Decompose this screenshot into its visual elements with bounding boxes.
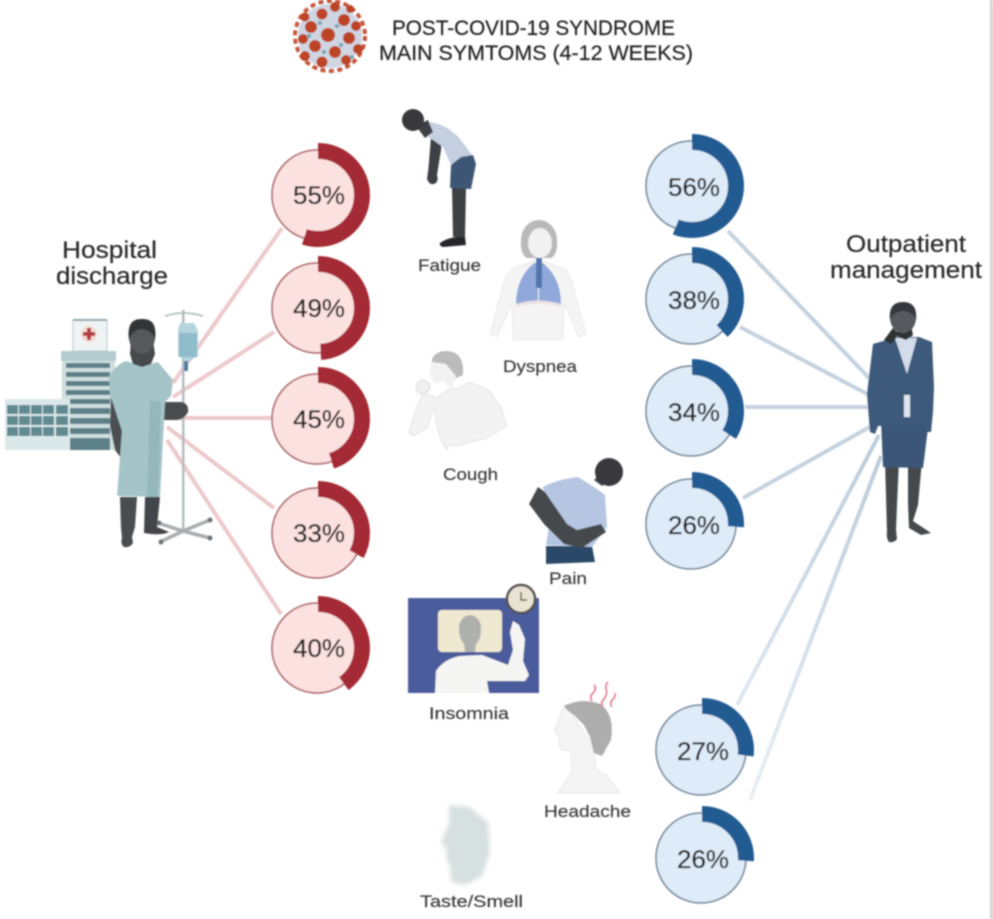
figure: headache bbox=[554, 682, 620, 793]
donut 26% bbox=[646, 479, 736, 569]
figure: patient bbox=[109, 319, 188, 547]
heading: outpatient management: Outpatient bbox=[846, 231, 966, 258]
icon: IV drip stand bbox=[156, 310, 212, 544]
donut 38%: 38% bbox=[668, 287, 720, 315]
figure: outpatient clinician bbox=[867, 302, 934, 542]
figure: fatigue bbox=[402, 109, 476, 247]
figure: taste and smell bbox=[441, 805, 490, 885]
donut 27%: 27% bbox=[677, 738, 729, 766]
figure: pain bbox=[529, 458, 623, 564]
donut 38% bbox=[646, 254, 736, 344]
label: Cough: Cough bbox=[443, 465, 498, 484]
connector lines: hospital discharge bbox=[167, 228, 282, 614]
figure: insomnia bbox=[408, 585, 539, 693]
donut 49%: 49% bbox=[293, 295, 345, 323]
donut 55% bbox=[272, 150, 362, 240]
donut 34%: 34% bbox=[668, 399, 720, 427]
icon: coronavirus bbox=[295, 1, 365, 71]
donut 27% bbox=[656, 705, 746, 795]
label: Headache: Headache bbox=[544, 802, 631, 821]
figure: dyspnea bbox=[490, 220, 586, 340]
donut 26%: 26% bbox=[668, 512, 720, 540]
icon: hospital building bbox=[5, 319, 116, 450]
donut 40%: 40% bbox=[293, 635, 345, 663]
label: Dyspnea: Dyspnea bbox=[503, 357, 578, 376]
donut 40% bbox=[272, 603, 362, 693]
right edge rule bbox=[990, 0, 993, 919]
figure: cough bbox=[409, 351, 507, 450]
donut 56% bbox=[646, 141, 736, 231]
title: MAIN SYMTOMS (4-12 WEEKS) bbox=[379, 42, 693, 65]
label: Pain: Pain bbox=[549, 569, 587, 588]
label: Fatigue: Fatigue bbox=[418, 256, 481, 275]
label: Insomnia: Insomnia bbox=[429, 704, 510, 723]
donut 45% bbox=[272, 374, 362, 464]
title bbox=[379, 17, 693, 65]
donut 55%: 55% bbox=[293, 182, 345, 210]
donut 26% lower: 26% bbox=[677, 846, 729, 874]
donut 26% lower bbox=[656, 813, 746, 903]
connector lines: outpatient management bbox=[728, 231, 881, 800]
title: POST-COVID-19 SYNDROME bbox=[392, 17, 675, 40]
donut 45%: 45% bbox=[293, 406, 345, 434]
donut 33%: 33% bbox=[293, 520, 345, 548]
donut 49% bbox=[272, 263, 362, 353]
heading: hospital discharge: Hospital bbox=[62, 237, 157, 264]
heading: outpatient management bbox=[830, 231, 982, 284]
donut 33% bbox=[272, 488, 362, 578]
donut 56%: 56% bbox=[668, 174, 720, 202]
heading: hospital discharge bbox=[56, 237, 168, 290]
heading: hospital discharge: discharge bbox=[56, 263, 168, 290]
heading: outpatient management: management bbox=[830, 257, 982, 284]
label: Taste/Smell: Taste/Smell bbox=[420, 892, 523, 911]
donut 34% bbox=[646, 366, 736, 456]
